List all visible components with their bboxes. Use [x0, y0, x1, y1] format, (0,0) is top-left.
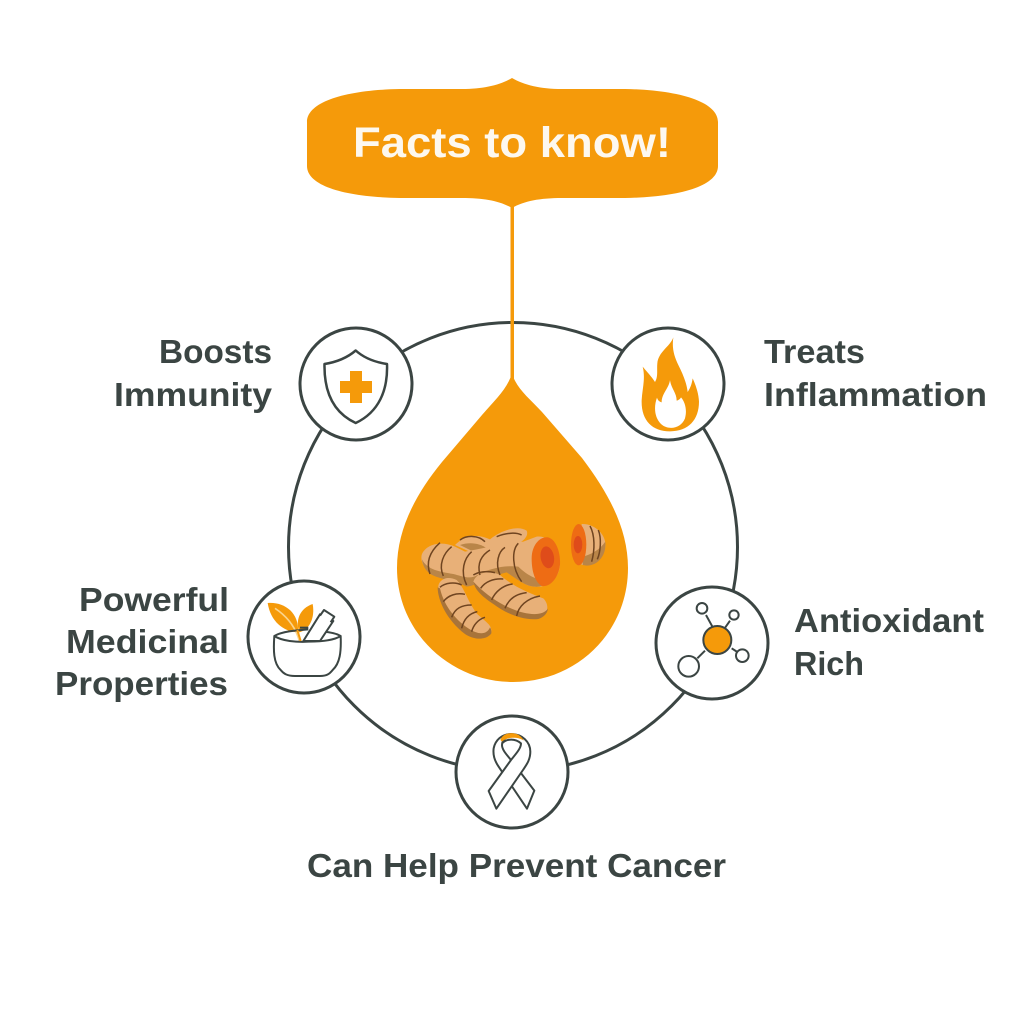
label: boosts immunity — [114, 333, 273, 413]
label: antioxidant rich: Antioxidant — [794, 602, 984, 639]
connector line — [510, 205, 514, 380]
node: treats inflammation — [612, 328, 724, 440]
icon: shield — [324, 350, 387, 423]
label: treats inflammation: Treats — [764, 333, 865, 370]
node: medicinal properties — [248, 581, 360, 693]
label: antioxidant rich: Rich — [794, 645, 864, 682]
label: boosts immunity: Boosts — [159, 333, 272, 370]
icon: ribbon — [489, 733, 534, 809]
label: antioxidant rich — [794, 602, 984, 682]
node: prevent cancer — [456, 716, 568, 828]
central drop with turmeric — [397, 373, 628, 682]
illustration: turmeric slice — [571, 524, 605, 566]
heading: Facts to know! — [353, 119, 671, 167]
label: powerful medicinal properties: Powerful — [79, 581, 229, 618]
label: powerful medicinal properties: Properties — [55, 665, 228, 702]
label: treats inflammation — [764, 333, 987, 413]
icon: flame — [642, 337, 699, 431]
label: can help prevent cancer: Can Help Prevent Cancer — [307, 847, 726, 884]
node: antioxidant rich — [656, 587, 768, 699]
icon: molecule — [678, 603, 749, 677]
main ring — [288, 322, 738, 772]
node: boosts immunity — [300, 328, 412, 440]
icon: mortar and pestle with leaves — [268, 603, 341, 676]
label: treats inflammation: Inflammation — [764, 376, 987, 413]
label: powerful medicinal properties — [55, 581, 229, 702]
illustration: turmeric root — [421, 524, 605, 639]
label: powerful medicinal properties: Medicinal — [66, 623, 229, 660]
banner: facts to know — [307, 78, 718, 208]
label: boosts immunity: Immunity — [114, 376, 273, 413]
